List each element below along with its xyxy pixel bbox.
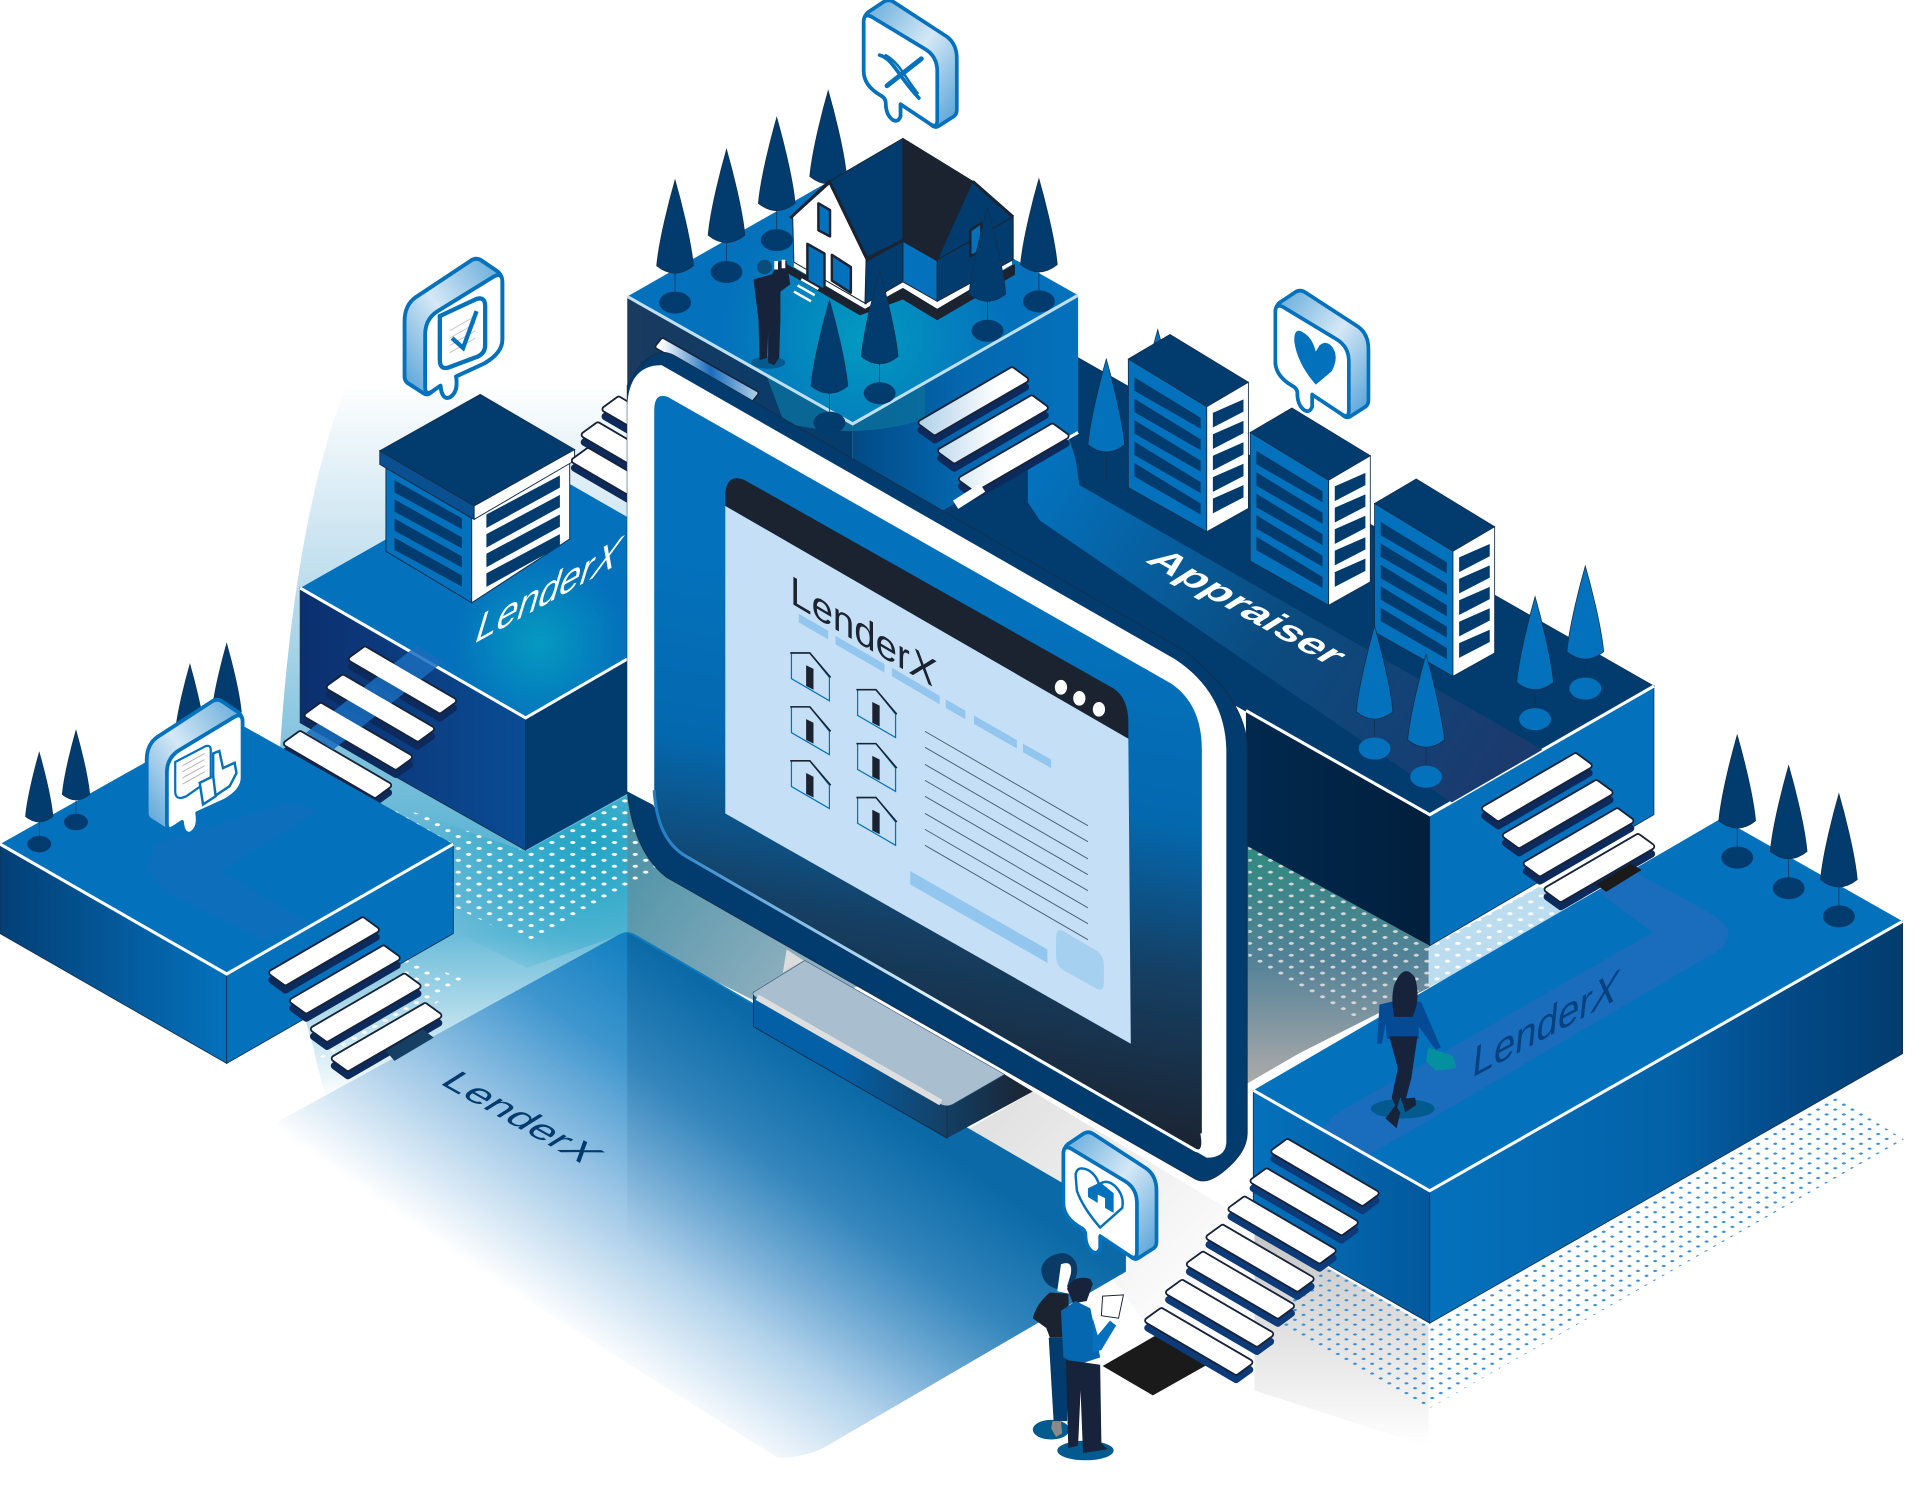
tree: appraiser block left: [1088, 359, 1125, 481]
trees: appraiser block: [1356, 566, 1604, 788]
screen title bar: [725, 478, 1128, 739]
building 1: [1128, 334, 1248, 532]
stairs: garage block: [287, 646, 453, 802]
house: [787, 138, 1014, 320]
background halo: [279, 331, 628, 1225]
grey floor shadow under monitor: [968, 1092, 1255, 1348]
stairs: appraiser block: [1485, 756, 1651, 907]
icon: heart bubble: [1275, 291, 1368, 417]
stair shadow: appraiser block: [1596, 864, 1642, 892]
dotted floor: blue dots under right block: [1262, 1094, 1904, 1409]
screen house icons: [790, 653, 897, 845]
big floor panel: [277, 932, 1126, 1458]
panel: appraiser block: [854, 358, 1654, 946]
building 3: [1375, 479, 1495, 676]
tree behind buildings: [1139, 330, 1176, 463]
trees: house block back: [657, 91, 1057, 314]
black shadow under stairs: [1103, 1333, 1212, 1395]
window dots: [1055, 680, 1105, 717]
icon: X bubble: [864, 0, 957, 127]
appraiser path: [1028, 429, 1542, 802]
grey shadow below right block: [1255, 1225, 1428, 1447]
monitor back: [627, 353, 1247, 1181]
screen text lines: [925, 731, 1088, 940]
stripe across garage stairs: [306, 646, 444, 750]
stair shadow: left block: [386, 1029, 434, 1061]
trees: house block front: [811, 208, 1006, 434]
floor LenderX text: LenderX: [432, 1066, 611, 1170]
panel: left block: [0, 717, 453, 974]
document lines: [183, 753, 205, 784]
left block walls: [0, 844, 453, 1063]
stairs: garage block to house block: [575, 399, 707, 519]
couple: [1033, 1253, 1123, 1460]
thumb: [213, 751, 236, 796]
screen: [725, 506, 1131, 1044]
icon: check bubble: [405, 259, 502, 398]
left block path: [147, 802, 319, 940]
garage block LenderX text: LenderX: [470, 526, 628, 654]
cuff: [200, 776, 216, 804]
document: [175, 746, 211, 798]
stairs: lower right block: [1148, 1142, 1376, 1379]
panel: lower right block: [1253, 818, 1903, 1323]
screen button: [1056, 930, 1104, 990]
dotted floor: centre left: [386, 795, 658, 942]
Appraiser label: Appraiser: [1137, 543, 1358, 670]
icon: house heart bubble: [1063, 1132, 1157, 1259]
X mark: [880, 55, 921, 98]
monitor blue panel: [654, 396, 1202, 1150]
dotted floor: under left stairs: [306, 956, 466, 1066]
man: [1067, 1278, 1093, 1303]
stairs: left block: [272, 920, 439, 1076]
teal glow around dots: [386, 795, 627, 968]
woman walking: [1371, 971, 1457, 1128]
monitor: [627, 353, 1247, 1181]
screen bar: [910, 871, 1047, 963]
panel: house block: [627, 168, 1078, 562]
monitor white frame: [627, 365, 1226, 1158]
lower right block LenderX text: LenderX: [1470, 960, 1622, 1088]
monitor lower edge line: [654, 790, 1203, 1151]
woman: [1041, 1253, 1077, 1289]
icon: thumbs up bubble: [147, 700, 243, 834]
heart outline: [1076, 1168, 1123, 1228]
check lines: [450, 316, 475, 353]
checklist: [440, 298, 485, 368]
trees: left block: [25, 643, 241, 852]
house block glow below edge: [766, 374, 925, 431]
stairs: house block right: [921, 370, 1066, 496]
house: [1088, 1182, 1114, 1213]
floor between monitor and appraiser block: [1246, 839, 1430, 1084]
dotted floor: between monitor and appraiser: [1248, 844, 1428, 1021]
stair: house block left: [658, 341, 756, 399]
panel: garage block: [300, 459, 627, 850]
monitor stand: [753, 949, 1033, 1138]
man with binoculars: [751, 260, 790, 369]
trees: lower right block: [1719, 735, 1857, 927]
light floor patch below appraiser block: [1428, 887, 1598, 987]
garage building: [380, 394, 575, 603]
floor panel darker half: [627, 932, 1126, 1448]
floor shading under monitor: [627, 791, 858, 1017]
stair: below house block: [956, 488, 983, 505]
dotted floor: light patch: [1428, 887, 1598, 987]
screen tabs: [799, 614, 1051, 768]
building 2: [1250, 408, 1370, 605]
heart: [1294, 331, 1336, 385]
screen LenderX logo: LenderX: [790, 567, 937, 699]
lower right path: [1316, 869, 1729, 1158]
check mark: [452, 311, 477, 348]
